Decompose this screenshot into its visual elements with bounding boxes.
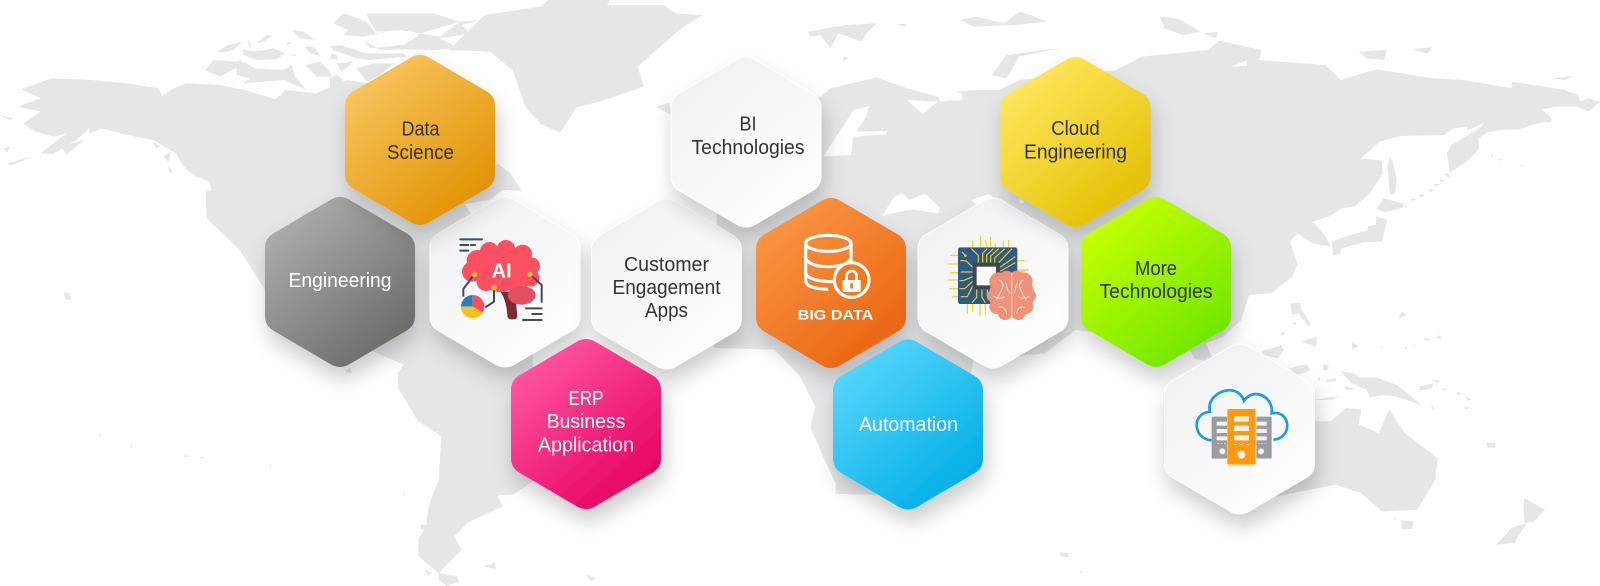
label: Cloud Engineering: Cloud xyxy=(1051,118,1100,140)
hexagon: Cloud Engineering xyxy=(1000,57,1150,227)
label: Engineering: Engineering xyxy=(288,270,392,292)
Southeast Asia islands xyxy=(1240,297,1472,409)
hexagon: Engineering xyxy=(265,197,415,367)
Sakhalin, Japan and Kuril islands xyxy=(1332,153,1525,256)
hexagon: Automation xyxy=(833,340,983,510)
North America xyxy=(0,78,671,367)
label: Automation: Automation xyxy=(859,414,958,436)
label: Cloud Engineering xyxy=(1024,118,1127,164)
icon: AI brain with pie chart xyxy=(460,239,542,320)
Arctic islands and Greenland xyxy=(205,13,480,92)
icon: AI brain with pie chart: AI xyxy=(492,260,512,282)
label: More Technologies xyxy=(1100,258,1212,303)
hexagon: Customer Engagement Apps xyxy=(592,199,742,369)
hexagon: AI xyxy=(430,197,580,367)
label: ERP Business Application: Business xyxy=(547,411,625,433)
icon: database with padlock xyxy=(798,235,873,322)
label: Customer Engagement Apps: Apps xyxy=(645,300,688,322)
label: BI Technologies xyxy=(692,114,804,159)
label: More Technologies: Technologies xyxy=(1100,281,1212,303)
label: Customer Engagement Apps xyxy=(612,254,721,322)
label: Cloud Engineering: Engineering xyxy=(1024,142,1127,164)
icon: circuit chip with brain xyxy=(947,236,1036,320)
hexagon: More Technologies xyxy=(1081,197,1231,367)
label: BIG DATA: BIG DATA xyxy=(798,306,873,322)
hexagon: cloud servers xyxy=(1164,344,1314,514)
label: BI Technologies: Technologies xyxy=(692,137,804,159)
label: ERP Business Application: ERP xyxy=(568,388,604,410)
label: More Technologies: More xyxy=(1135,258,1177,280)
hexagon: AI chip and brain xyxy=(918,198,1068,368)
South America xyxy=(64,293,597,586)
Australia and Oceania xyxy=(1059,408,1545,574)
label: Customer Engagement Apps: Customer xyxy=(624,254,709,276)
hexagon: ERP Business Application xyxy=(511,339,661,509)
icon: cloud with server racks xyxy=(1197,390,1287,465)
label: Data Science: Science xyxy=(387,142,454,164)
hexagon: Big Data xyxy=(756,198,906,368)
label: ERP Business Application: Application xyxy=(538,434,634,456)
label: Data Science: Data xyxy=(402,118,440,140)
hexagon: BI Technologies xyxy=(671,57,821,227)
label: ERP Business Application xyxy=(538,388,634,456)
label: Data Science xyxy=(387,118,454,164)
Seas cut out of Eurasia xyxy=(823,61,1247,217)
label: BI Technologies: BI xyxy=(740,114,756,136)
Greenland xyxy=(449,0,703,133)
label: Customer Engagement Apps: Engagement xyxy=(612,277,721,299)
hexagon: Data Science xyxy=(345,55,495,225)
Eurasia xyxy=(717,12,1600,367)
Africa xyxy=(713,260,973,495)
